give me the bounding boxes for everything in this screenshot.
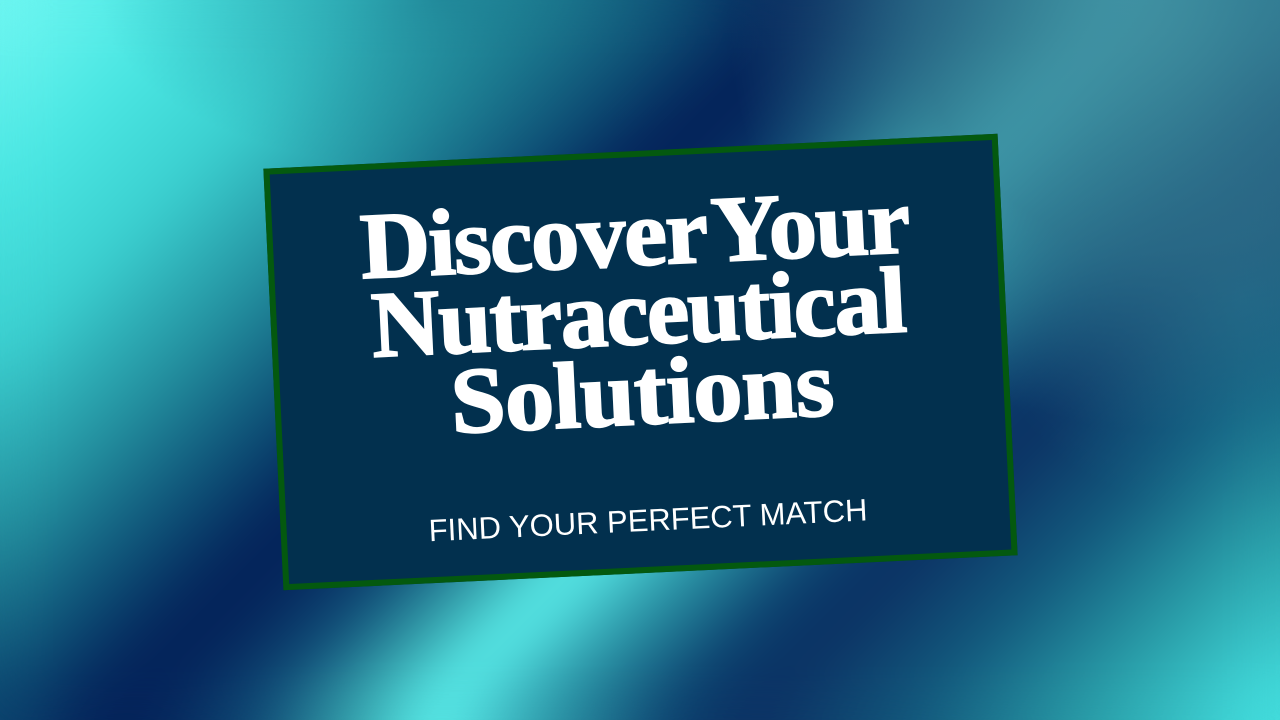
heading line: Solutions: Solutions xyxy=(448,331,835,454)
subtitle: FIND YOUR PERFECT MATCH xyxy=(427,492,868,548)
heading line: Discover Your: Discover Your xyxy=(358,169,910,299)
panel: title card xyxy=(263,133,1017,590)
heading line: Nutraceutical: Nutraceutical xyxy=(369,248,907,377)
